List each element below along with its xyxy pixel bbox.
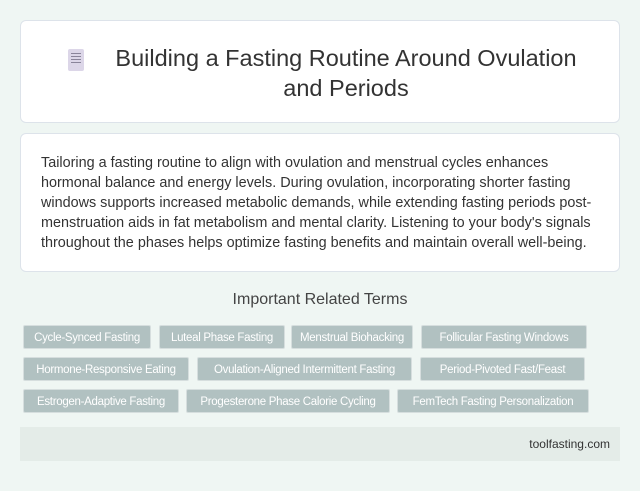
- description text: hormonal balance and energy levels. During ovulation, incorporating shorter fasting: [41, 175, 571, 191]
- tags: FemTech Fasting Personalization: [413, 396, 573, 408]
- tags: Estrogen-Adaptive Fasting: [37, 396, 165, 408]
- description text: windows supports increased metabolic demands, while extending fasting periods post-: [41, 195, 591, 211]
- icon: document: [68, 49, 84, 71]
- description text: [41, 155, 591, 251]
- tags: Follicular Fasting Windows: [440, 332, 568, 344]
- tags: Hormone-Responsive Eating: [36, 364, 176, 376]
- tags: Luteal Phase Fasting: [171, 332, 273, 344]
- related terms heading: Important Related Terms: [233, 291, 407, 308]
- tags: Menstrual Biohacking: [300, 332, 404, 344]
- footer source: toolfasting.com: [529, 437, 610, 451]
- tags: Cycle-Synced Fasting: [34, 332, 140, 344]
- header card: [20, 20, 620, 123]
- description card: [20, 133, 620, 272]
- title: Building a Fasting Routine Around Ovulation and Periods: [115, 45, 577, 101]
- tags: Ovulation-Aligned Intermittent Fasting: [214, 364, 395, 376]
- tags: Progesterone Phase Calorie Cycling: [200, 396, 376, 408]
- description text: throughout the phases helps optimize fasting benefits and maintain overall well-being.: [41, 235, 587, 251]
- tags: Period-Pivoted Fast/Feast: [440, 364, 565, 376]
- description text: menstruation aids in fat metabolism and mental clarity. Listening to your body's signals: [41, 215, 591, 231]
- footer: [20, 427, 620, 461]
- description text: Tailoring a fasting routine to align with ovulation and menstrual cycles enhances: [41, 155, 548, 171]
